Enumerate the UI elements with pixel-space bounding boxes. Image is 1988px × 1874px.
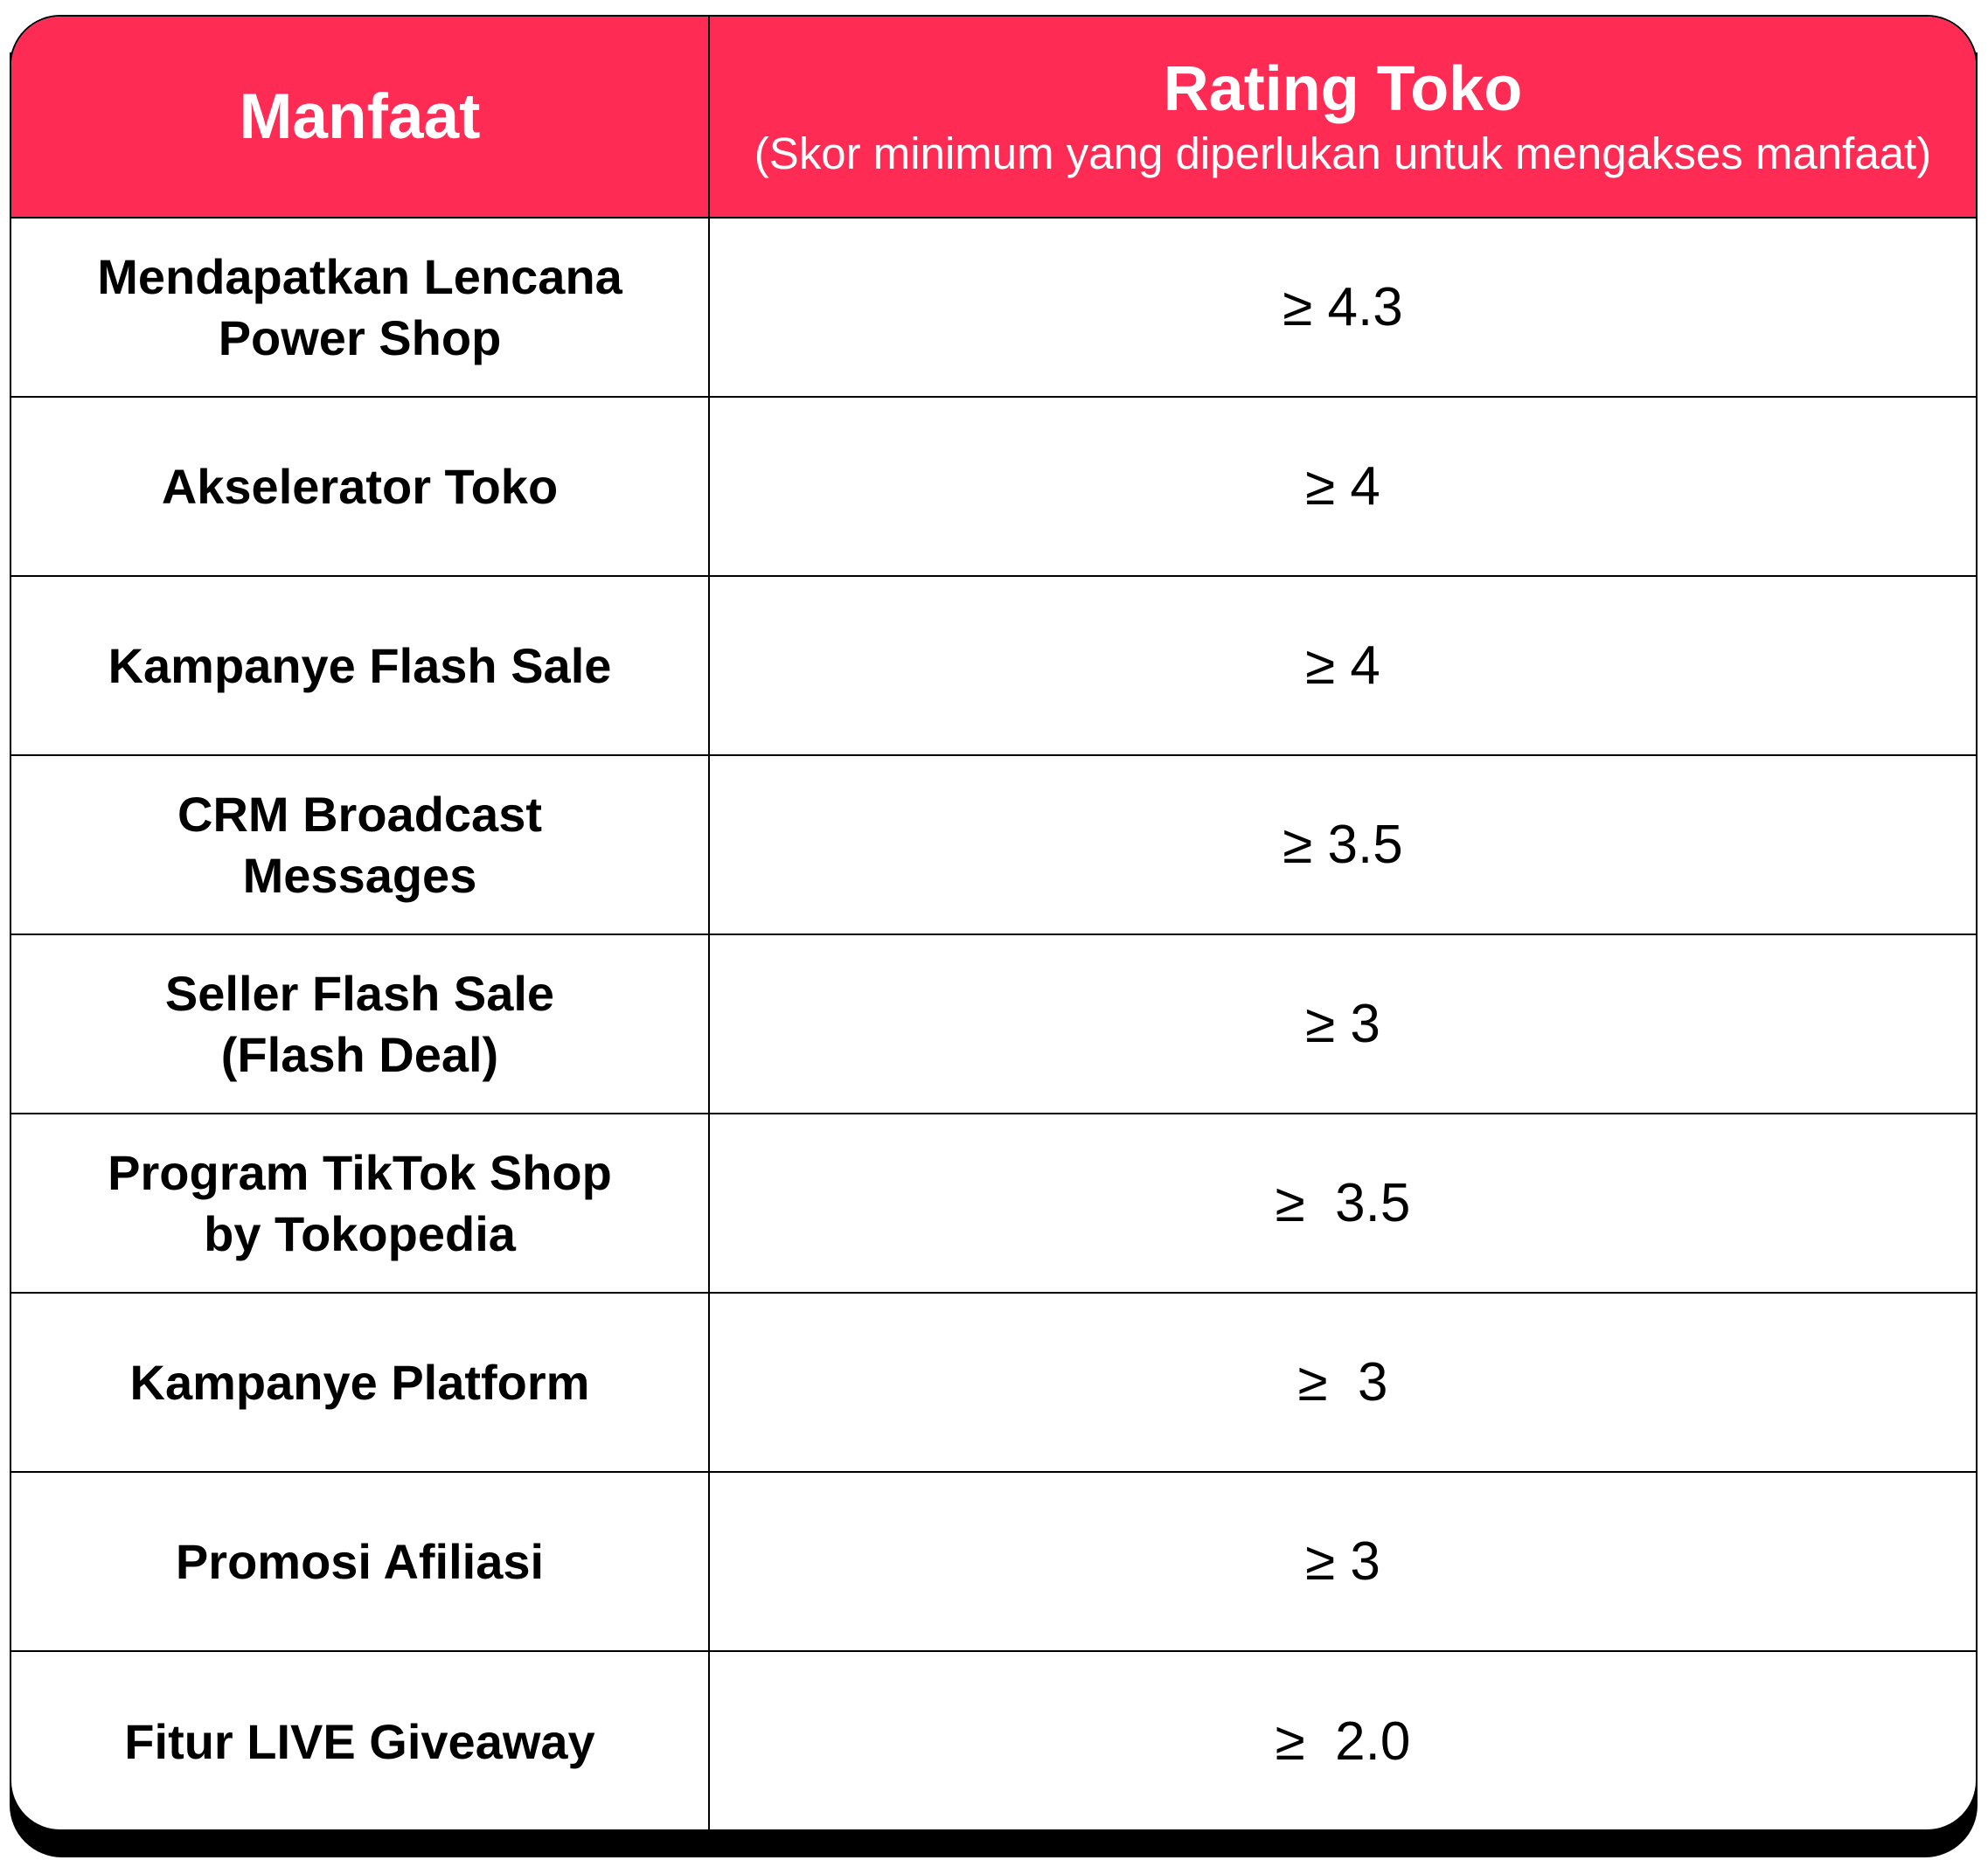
row 1: Power Shop: [219, 309, 501, 365]
row 8: Promosi Afiliasi: [176, 1533, 544, 1589]
row 9: Fitur LIVE Giveaway: [124, 1713, 595, 1769]
row 4: Messages: [243, 848, 476, 902]
row 5: (Flash Deal): [221, 1026, 498, 1082]
row 6: Program TikTok Shop: [108, 1145, 612, 1199]
row 5: [11, 935, 1976, 1114]
row 5: Seller Flash Sale: [165, 965, 554, 1021]
row 1: ≥ 4.3: [1282, 277, 1403, 337]
row 4: [11, 756, 1976, 935]
header: Rating Toko: (Skor minimum yang diperlukan untuk mengakses manfaat): [754, 128, 1931, 178]
row 7: Kampanye Platform: [130, 1355, 589, 1409]
row 6: by Tokopedia: [204, 1206, 516, 1260]
row 3: Kampanye Flash Sale: [108, 638, 611, 692]
row 6: ≥ 3.5: [1276, 1173, 1410, 1233]
row 2: Akselerator Toko: [162, 458, 558, 514]
row 9: ≥ 2.0: [1276, 1711, 1410, 1772]
row 7: [11, 1294, 1976, 1473]
row 7: ≥ 3: [1298, 1352, 1387, 1412]
row 5: ≥ 3: [1305, 994, 1380, 1054]
header: Rating Toko: [754, 54, 1931, 178]
row 1: Mendapatkan Lencana: [97, 248, 622, 304]
row 6: [11, 1114, 1976, 1294]
row 8: ≥ 3: [1305, 1531, 1380, 1592]
header: Rating Toko: Rating Toko: [1164, 54, 1522, 124]
row 8: [11, 1473, 1976, 1652]
row 3: ≥ 4: [1305, 635, 1380, 696]
row 4: CRM Broadcast: [177, 787, 542, 841]
row 2: ≥ 4: [1305, 456, 1380, 517]
header bar: [11, 17, 1976, 219]
header: Manfaat: Manfaat: [240, 81, 480, 152]
row 9: [124, 1711, 1410, 1772]
row 1: [11, 219, 1976, 398]
row 4: ≥ 3.5: [1282, 815, 1403, 875]
row 2: [11, 398, 1976, 577]
row 3: [11, 577, 1976, 756]
